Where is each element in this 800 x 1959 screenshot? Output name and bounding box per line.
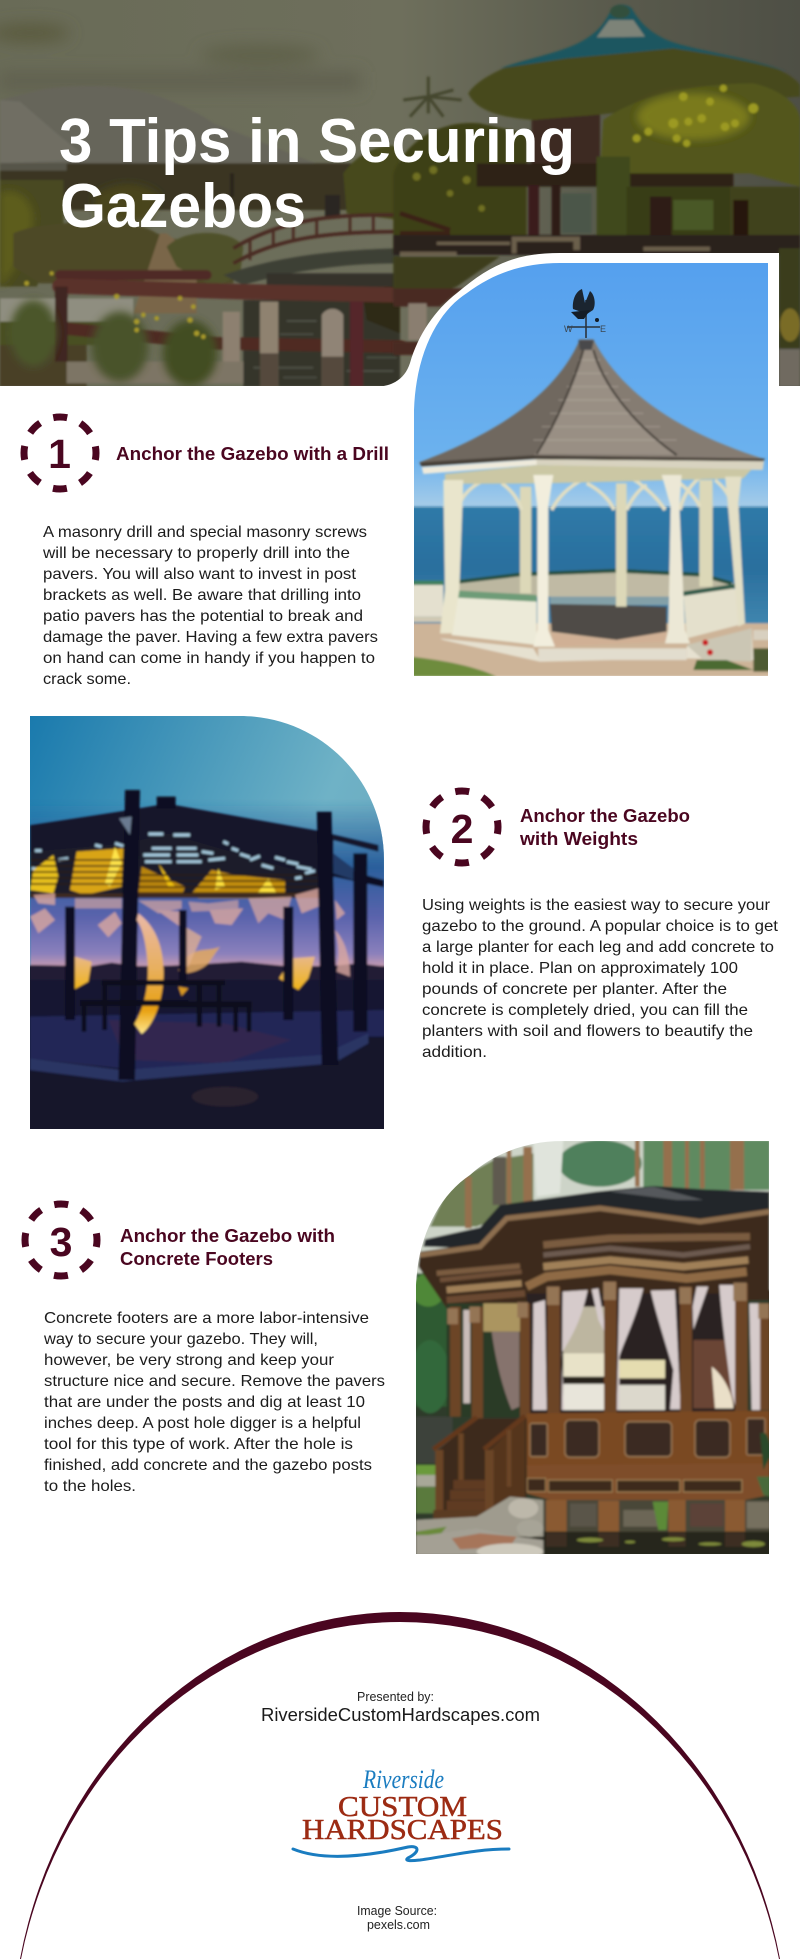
tip 2 number badge <box>426 791 498 863</box>
tip 2 body text: Using weights is the easiest way to secure your <box>422 897 771 914</box>
image source credit: Image Source: <box>357 1904 437 1918</box>
tip 2 heading: with Weights <box>519 828 638 849</box>
tip 1 body text: will be necessary to properly drill into the <box>42 545 350 562</box>
title <box>59 107 575 241</box>
tip 1 number badge: 1 <box>48 431 71 477</box>
tip 3 body text: that are under the posts and dig at least 10 <box>44 1394 365 1411</box>
tip 2 heading: Anchor the Gazebo <box>520 805 690 826</box>
tip 3 body text: way to secure your gazebo. They will, <box>43 1331 318 1348</box>
tip 3 body text: however, be very strong and keep your <box>44 1352 335 1369</box>
tip 3 body text: Concrete footers are a more labor-intensive <box>44 1310 369 1327</box>
weather vane <box>564 289 606 338</box>
tip 1 heading: Anchor the Gazebo with a Drill <box>116 443 389 464</box>
tip 3 number badge <box>25 1204 97 1276</box>
company logo: HARDSCAPES <box>302 1814 503 1846</box>
title: Gazebos <box>60 172 306 241</box>
left half of the garden scene <box>0 86 400 387</box>
tip 1 number badge <box>24 417 96 489</box>
tip 2 body text: planters with soil and flowers to beautify the <box>422 1023 753 1040</box>
company logo: CUSTOM <box>338 1791 467 1823</box>
tip 3 body text <box>43 1310 385 1495</box>
tip 3 body text: to the holes. <box>44 1478 136 1495</box>
tip 3 body text: inches deep. A post hole digger is a helpful <box>44 1415 361 1432</box>
image source credit: pexels.com <box>367 1918 430 1932</box>
footer crescent arc <box>20 1612 780 1959</box>
tip 2 photo: gazebo with light trails at dusk <box>25 716 388 1133</box>
tip 1 body text: crack some. <box>43 671 131 688</box>
weather vane: E <box>600 324 606 334</box>
tip 2 body text: a large planter for each leg and add concrete to <box>422 939 774 956</box>
website: RiversideCustomHardscapes.com <box>261 1704 540 1725</box>
tip 3 body text: tool for this type of work. After the hole is <box>44 1436 353 1453</box>
tip 3 body text: finished, add concrete and the gazebo posts <box>44 1457 372 1474</box>
company logo <box>293 1765 509 1861</box>
tip 1 body text: damage the paver. Having a few extra pavers <box>43 629 378 646</box>
weather vane: W <box>564 324 573 334</box>
company logo: Riverside <box>362 1765 444 1794</box>
tip 3 heading <box>120 1225 335 1269</box>
tip 3 heading: Anchor the Gazebo with <box>120 1225 335 1246</box>
tip 2 body text: concrete is completely dried, you can fill the <box>422 1002 748 1019</box>
tip 2 body text <box>422 897 779 1061</box>
tip 1 body text: brackets as well. Be aware that drilling into <box>43 587 361 604</box>
title: 3 Tips in Securing <box>59 107 575 176</box>
tip 1 body text: patio pavers has the potential to break and <box>43 608 363 625</box>
white curved frame behind first photo <box>378 253 779 387</box>
hero photo: garden with gazebos <box>0 0 800 387</box>
tip 3 number badge: 3 <box>50 1219 72 1265</box>
tip 2 number badge: 2 <box>451 806 473 852</box>
tip 2 body text: hold it in place. Plan on approximately 100 <box>422 960 738 977</box>
tip 1 body text: A masonry drill and special masonry screws <box>43 524 367 541</box>
tip 1 body text <box>42 524 378 688</box>
presented by: Presented by: <box>357 1690 434 1704</box>
tip 3 heading: Concrete Footers <box>120 1248 273 1269</box>
tip 1 body text: on hand can come in handy if you happen to <box>43 650 375 667</box>
tip 2 body text: gazebo to the ground. A popular choice is to get <box>422 918 779 935</box>
image source credit <box>357 1904 437 1932</box>
right half of the garden scene <box>393 5 800 387</box>
tip 2 heading <box>519 805 690 849</box>
tip 2 body text: pounds of concrete per planter. After the <box>422 981 727 998</box>
tip 3 photo: carved wooden gazebo <box>410 1140 773 1560</box>
tip 2 body text: addition. <box>422 1044 487 1061</box>
tip 1 photo: white gazebo by the sea <box>410 263 770 677</box>
tip 1 body text: pavers. You will also want to invest in post <box>43 566 357 583</box>
tip 3 body text: structure nice and secure. Remove the pavers <box>44 1373 385 1390</box>
